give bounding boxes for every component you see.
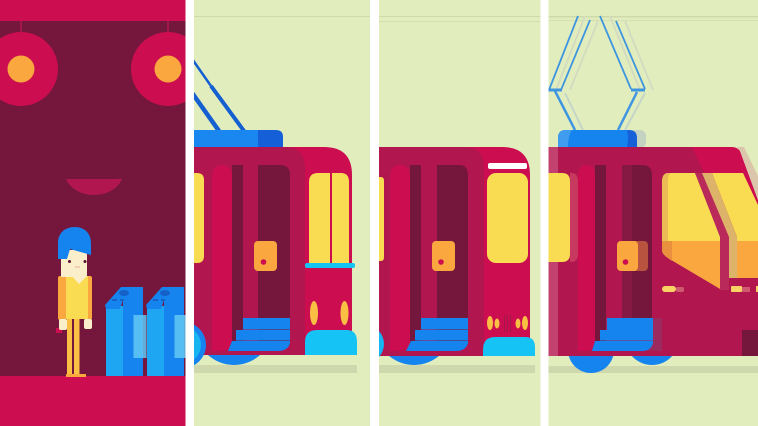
grille <box>504 315 511 332</box>
lamp: right <box>131 21 186 106</box>
turnstile: right <box>146 287 186 376</box>
turnstile: left <box>105 287 146 376</box>
side window <box>548 173 578 262</box>
wheels <box>568 311 679 373</box>
open door <box>390 165 468 351</box>
panel: tram three-quarter view <box>548 0 758 426</box>
track shadow <box>194 365 357 373</box>
rear bogie wheel <box>208 355 260 365</box>
ceiling light <box>66 179 122 195</box>
tram body <box>548 147 758 356</box>
steps <box>228 318 290 351</box>
windscreen <box>662 173 758 290</box>
door panel <box>617 241 648 271</box>
window sill <box>305 263 355 268</box>
tram body <box>284 147 352 342</box>
headlights <box>310 301 348 325</box>
destination light <box>488 163 527 169</box>
trolley poles <box>190 56 244 131</box>
tram body <box>464 147 530 344</box>
front wheel <box>194 324 206 366</box>
person <box>56 227 92 377</box>
track shadow <box>548 366 758 373</box>
panel: tram side view <box>194 0 370 426</box>
open door <box>578 165 652 351</box>
open door <box>212 165 290 351</box>
panel: station <box>0 0 205 426</box>
side window <box>194 173 204 263</box>
steps <box>592 318 662 351</box>
ghost roof edge <box>737 147 758 200</box>
lamp: left <box>0 21 58 106</box>
steps <box>406 318 468 351</box>
front hatch <box>742 330 758 356</box>
roof unit <box>194 130 283 148</box>
roof unit <box>558 130 646 148</box>
door panel <box>432 241 455 271</box>
headlights <box>487 316 528 330</box>
pantograph <box>548 16 645 130</box>
headlights <box>662 286 758 292</box>
side window <box>379 177 384 261</box>
pantograph ghost <box>556 16 653 130</box>
door panel <box>254 241 277 271</box>
bumper <box>305 330 357 355</box>
bumper <box>483 337 535 356</box>
track shadow <box>379 365 535 373</box>
panel: tram front detail <box>379 0 540 426</box>
front window <box>487 173 528 263</box>
front wheel <box>379 331 384 357</box>
front windows <box>309 173 349 263</box>
rear bogie wheel <box>389 356 439 365</box>
